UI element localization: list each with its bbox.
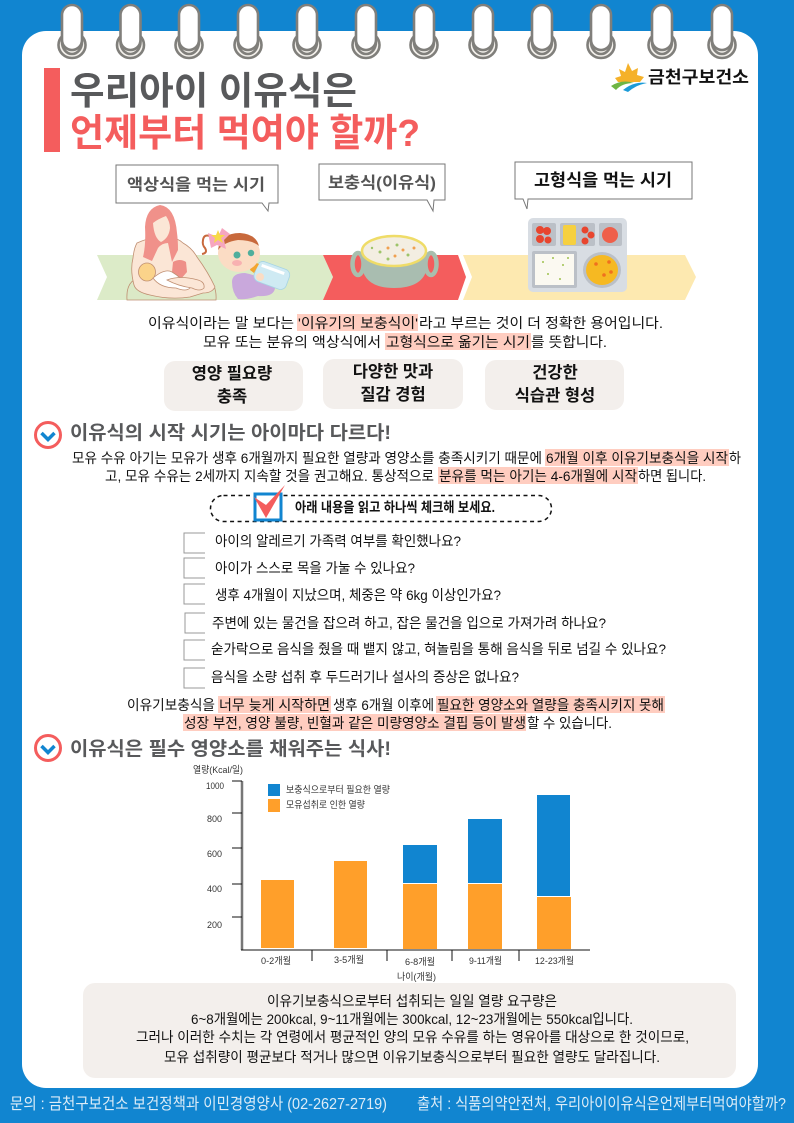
text block: intro: 고형식으로 옮기는 시기 — [386, 334, 530, 350]
bar chart: 모유섭취로 인한 열량 — [286, 799, 365, 811]
logo: health center — [611, 63, 749, 92]
icon: section check 1 — [36, 422, 60, 448]
bar chart: 열량(Kcal/일) — [193, 764, 243, 776]
icon: breastfeeding mother — [127, 205, 216, 300]
title — [44, 68, 420, 155]
footer: contact: 문의 : 금천구보건소 보건정책과 이민경영양사 (02-2627-2719) — [10, 1095, 387, 1113]
arrow: green stage — [97, 255, 333, 300]
title: 우리아이 이유식은 — [70, 71, 357, 113]
text block: late start warning: 성장 부전, 영양 불량, 빈혈과 같은 미량영양소 결핍 등이 발생 — [184, 715, 526, 731]
bar chart: 1000 — [206, 781, 224, 792]
bar chart — [193, 764, 590, 983]
checklist: 숟가락으로 음식을 줬을 때 뱉지 않고, 혀놀림을 통해 음식을 뒤로 넘길 수 있나요? — [211, 641, 666, 657]
text block: intro: 모유 또는 분유의 액상식에서 — [203, 334, 381, 350]
callout: complementary food: 보충식(이유식) — [328, 174, 436, 192]
text block: intro: 라고 부르는 것이 더 정확한 용어입니다. — [419, 315, 663, 331]
arrow: red stage — [323, 255, 466, 300]
text block: start timing body: 6개월 이후 이유기보충식을 시작 — [546, 450, 728, 466]
callout: solid food: 고형식을 먹는 시기 — [534, 171, 672, 190]
icon: meal tray — [528, 218, 627, 292]
arrow: yellow stage — [463, 255, 696, 300]
panel: nutrition need: 영양 필요량 — [192, 364, 272, 383]
panel: taste and texture — [323, 359, 463, 409]
text block: late start warning: 필요한 영양소와 열량을 충족시키지 못해 — [437, 697, 664, 713]
bar chart: 400 — [207, 884, 222, 895]
bar chart: 보충식으로부터 필요한 열량 — [286, 784, 390, 796]
text block: intro: '이유기의 보충식이' — [298, 315, 418, 331]
panel: daily energy note: 그러나 이러한 수치는 각 연령에서 평균적인 양의 모유 수유를 하는 영유아를 대상으로 한 것이므로, — [136, 1029, 689, 1045]
bar chart: 600 — [207, 849, 222, 860]
icon: baby with bottle — [202, 228, 291, 299]
text block: start timing body: 하면 됩니다. — [638, 468, 706, 484]
text block: start timing body — [72, 449, 741, 484]
checklist: 아이가 스스로 목을 가눌 수 있나요? — [215, 560, 415, 576]
panel: healthy habits: 건강한 — [532, 363, 578, 382]
text block: start timing body: 모유 수유 아기는 모유가 생후 6개월까지 필요한 열량과 영양소를 충족시키기 때문에 — [72, 450, 542, 466]
checklist: 음식을 소량 섭취 후 두드러기나 설사의 증상은 없나요? — [211, 669, 519, 685]
panel: taste and texture: 다양한 맛과 — [353, 362, 433, 381]
callout: check instruction: 아래 내용을 읽고 하나씩 체크해 보세요. — [295, 500, 495, 515]
text block: late start warning: 이유기보충식을 — [127, 697, 215, 713]
callout: check instruction — [210, 485, 552, 522]
panel: nutrition need: 충족 — [217, 387, 247, 406]
text block: late start warning: 생후 6개월 이후에 — [333, 697, 434, 713]
bar chart: 6-8개월 — [405, 956, 435, 968]
logo: health center: 금천구보건소 — [648, 68, 749, 87]
checklist: 주변에 있는 물건을 잡으려 하고, 잡은 물건을 입으로 가져가려 하나요? — [212, 615, 606, 631]
icon: porridge pot — [352, 236, 436, 288]
bar chart: 0-2개월 — [261, 955, 291, 967]
heading: start timing: 이유식의 시작 시기는 아이마다 다르다! — [70, 422, 391, 444]
text block: intro: 이유식이라는 말 보다는 — [148, 315, 294, 331]
bar chart: 나이(개월) — [397, 971, 436, 983]
text block: start timing body: 고, 모유 수유는 2세까지 지속할 것을 권고해요. 통상적으로 — [105, 468, 434, 484]
heading: essential nutrients: 이유식은 필수 영양소를 채워주는 식사! — [70, 738, 391, 760]
checklist: 아이의 알레르기 가족력 여부를 확인했나요? — [215, 533, 461, 549]
panel: taste and texture: 질감 경험 — [360, 385, 426, 404]
title: 언제부터 먹여야 할까? — [70, 113, 420, 155]
callout: solid food — [515, 162, 692, 209]
checklist — [184, 533, 666, 688]
checklist: 생후 4개월이 지났으며, 체중은 약 6kg 이상인가요? — [215, 587, 501, 603]
bar chart: 200 — [207, 920, 222, 931]
text block: intro — [148, 314, 663, 350]
panel: nutrition need — [164, 361, 303, 411]
bar chart: 12-23개월 — [535, 955, 574, 967]
callout: liquid food — [116, 165, 278, 211]
text block: late start warning — [127, 696, 665, 731]
bar chart: 800 — [207, 814, 222, 825]
text block: late start warning: 너무 늦게 시작하면 — [219, 697, 330, 713]
text block: intro: 를 뜻합니다. — [531, 334, 607, 350]
callout: liquid food: 액상식을 먹는 시기 — [127, 176, 265, 194]
panel: daily energy note — [83, 983, 736, 1078]
panel: daily energy note: 이유기보충식으로부터 섭취되는 일일 열량 요구량은 — [267, 993, 557, 1009]
icon: section check 2 — [36, 736, 60, 760]
panel: healthy habits: 식습관 형성 — [515, 386, 595, 405]
bar chart: 3-5개월 — [334, 954, 364, 966]
panel: daily energy note: 모유 섭취량이 평균보다 적거나 많으면 이유기보충식으로부터 필요한 열량도 달라집니다. — [164, 1049, 660, 1065]
panel: daily energy note: 6~8개월에는 200kcal, 9~11개월에는 300kcal, 12~23개월에는 550kcal입니다. — [191, 1011, 633, 1027]
callout: complementary food — [319, 164, 445, 211]
bar chart: 9-11개월 — [469, 955, 502, 967]
text block: late start warning: 할 수 있습니다. — [527, 715, 612, 731]
icon: spiral binding rings — [58, 5, 736, 58]
text block: start timing body: 하 — [729, 450, 741, 466]
text block: start timing body: 분유를 먹는 아기는 4-6개월에 시작 — [439, 468, 637, 484]
panel: healthy habits — [485, 360, 624, 410]
